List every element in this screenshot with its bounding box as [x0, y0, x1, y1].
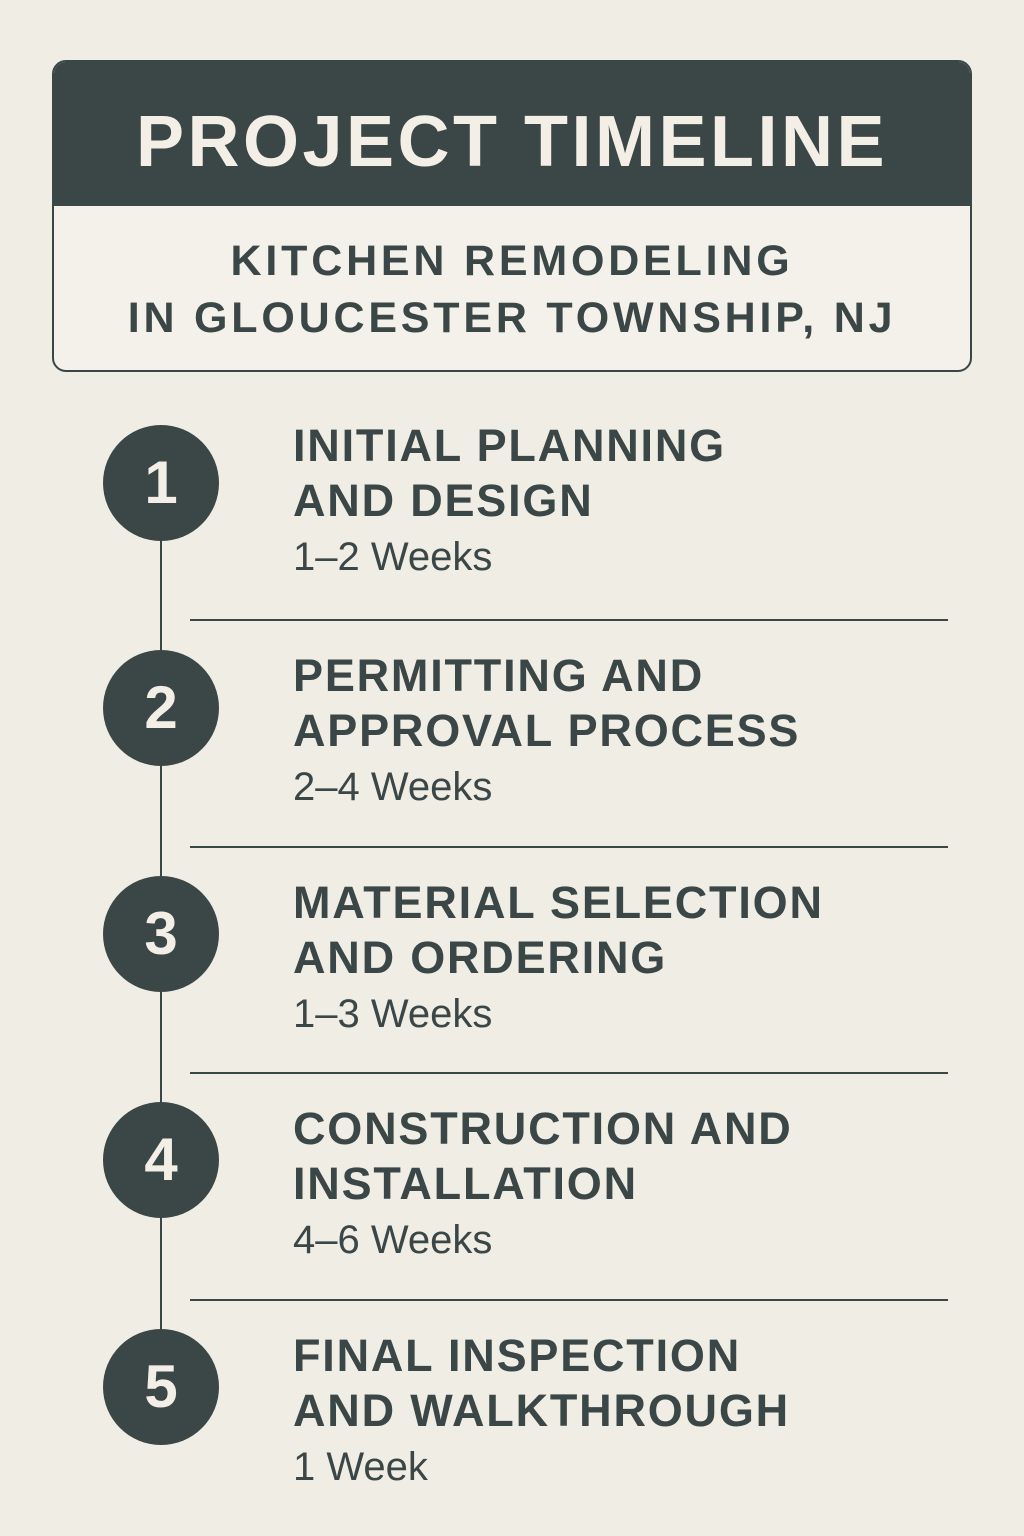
step 3 text: 1–3 Weeks — [293, 992, 492, 1036]
subtitle: KITCHEN REMODELING — [231, 237, 793, 285]
step 3 text — [293, 877, 824, 1036]
title — [54, 62, 970, 206]
step 3 text: AND ORDERING — [293, 932, 667, 983]
subtitle: IN GLOUCESTER TOWNSHIP, NJ — [128, 294, 896, 342]
step 4 text: INSTALLATION — [293, 1158, 638, 1209]
title: PROJECT TIMELINE — [136, 102, 888, 182]
step 1 circle: 1 — [144, 449, 178, 516]
step 2 text: 2–4 Weeks — [293, 765, 492, 809]
header panel — [52, 60, 972, 372]
step 4 text: CONSTRUCTION AND — [293, 1103, 793, 1154]
step 3 text: MATERIAL SELECTION — [293, 877, 824, 928]
step 2 text: APPROVAL PROCESS — [293, 705, 800, 756]
step 5 circle — [103, 1329, 219, 1445]
step 1 text: 1–2 Weeks — [293, 535, 492, 579]
step 3 circle: 3 — [144, 900, 178, 967]
step 5 circle: 5 — [144, 1353, 178, 1420]
step 2 circle — [103, 650, 219, 766]
step 1 text — [293, 420, 726, 579]
step 5 text: AND WALKTHROUGH — [293, 1385, 790, 1436]
step 1 text: AND DESIGN — [293, 475, 594, 526]
step 2 text: PERMITTING AND — [293, 650, 704, 701]
step 4 circle — [103, 1102, 219, 1218]
step 4 circle: 4 — [144, 1126, 178, 1193]
step 3 circle — [103, 876, 219, 992]
step 1 circle — [103, 425, 219, 541]
timeline connector line — [160, 483, 162, 1387]
step 5 text: FINAL INSPECTION — [293, 1330, 741, 1381]
step 5 text — [293, 1330, 790, 1489]
step 4 text: 4–6 Weeks — [293, 1218, 492, 1262]
step 5 text: 1 Week — [293, 1445, 428, 1489]
step 2 circle: 2 — [144, 674, 178, 741]
step 1 text: INITIAL PLANNING — [293, 420, 726, 471]
subtitle — [128, 237, 896, 342]
step 4 text — [293, 1103, 793, 1262]
step 2 text — [293, 650, 800, 809]
